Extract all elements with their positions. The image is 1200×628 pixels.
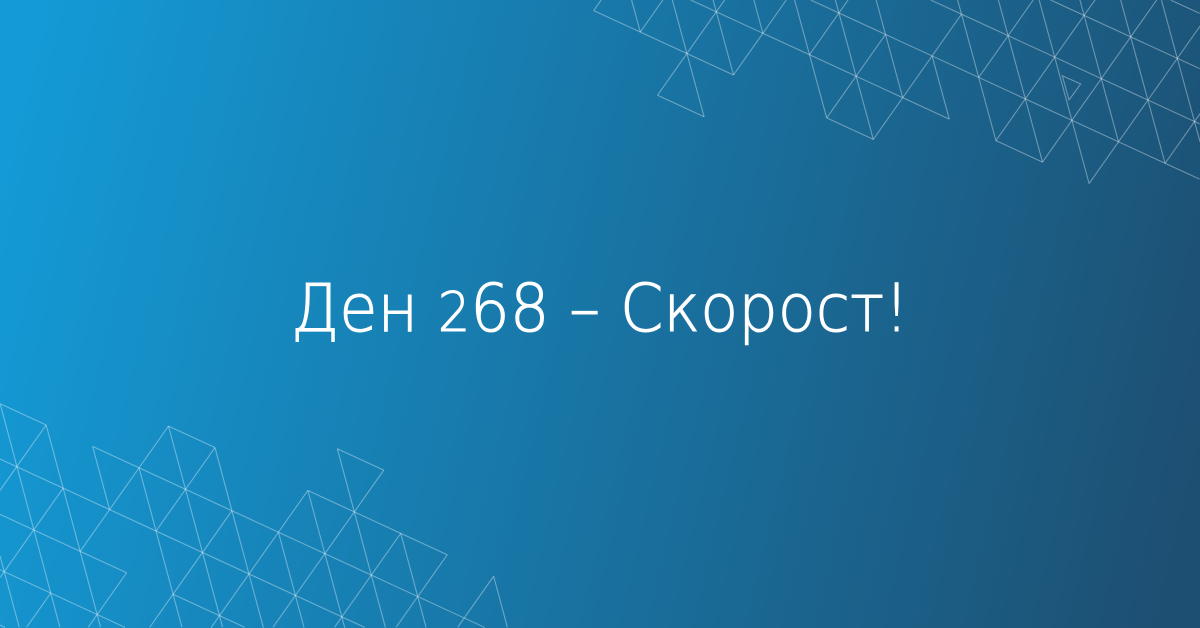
pattern: top-right triangle lattice bbox=[508, 0, 1200, 393]
pattern: bottom-left triangle lattice bbox=[0, 246, 579, 628]
title: Ден 268 – Скорост! bbox=[291, 270, 909, 347]
icon: small outlined triangle bbox=[1062, 76, 1081, 100]
